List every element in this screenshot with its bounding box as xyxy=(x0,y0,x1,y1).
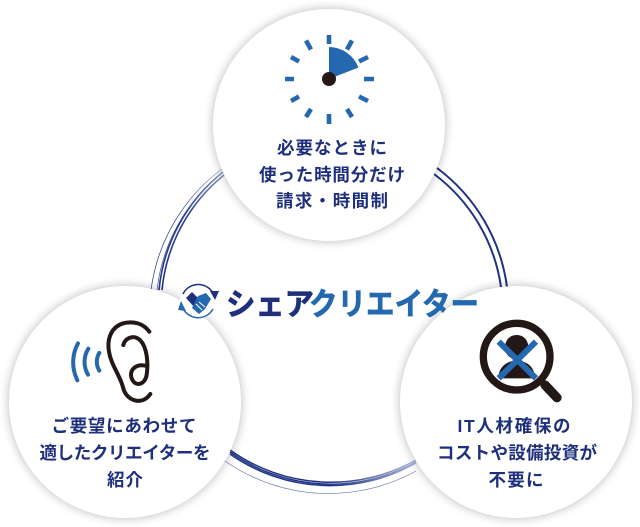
text: on-demand billing: 使った時間分だけ xyxy=(259,165,405,185)
text: no IT costs: IT人材確保の xyxy=(458,416,570,436)
text: on-demand billing xyxy=(259,138,405,211)
text: on-demand billing: 請求・時間制 xyxy=(276,191,388,211)
panel: matched creators xyxy=(9,286,241,518)
ring: right arc xyxy=(434,168,507,287)
icon: handshake with circular arrows xyxy=(178,283,219,319)
logo: Share Creator xyxy=(178,283,479,322)
icon: magnifier with crossed person xyxy=(483,323,557,398)
text: matched creators: 紹介 xyxy=(107,470,144,490)
text: no IT costs xyxy=(437,416,598,490)
text: matched creators: ご要望にあわせて xyxy=(52,416,196,436)
panel: no IT costs xyxy=(400,286,632,518)
text: no IT costs: 不要に xyxy=(488,470,544,490)
icon: clock xyxy=(285,35,374,124)
text: on-demand billing: 必要なときに xyxy=(277,138,387,158)
text: matched creators xyxy=(40,416,210,490)
panel: on-demand billing xyxy=(213,9,445,241)
text: no IT costs: コストや設備投資が xyxy=(437,443,598,463)
text: matched creators: 適したクリエイターを xyxy=(40,443,210,463)
ring: bottom arc xyxy=(225,450,416,494)
logo: Share Creator: クリエイター xyxy=(309,287,479,322)
icon: ear xyxy=(73,322,150,401)
ring: upper left arc xyxy=(151,169,224,290)
wordmark: シェア xyxy=(226,287,314,322)
